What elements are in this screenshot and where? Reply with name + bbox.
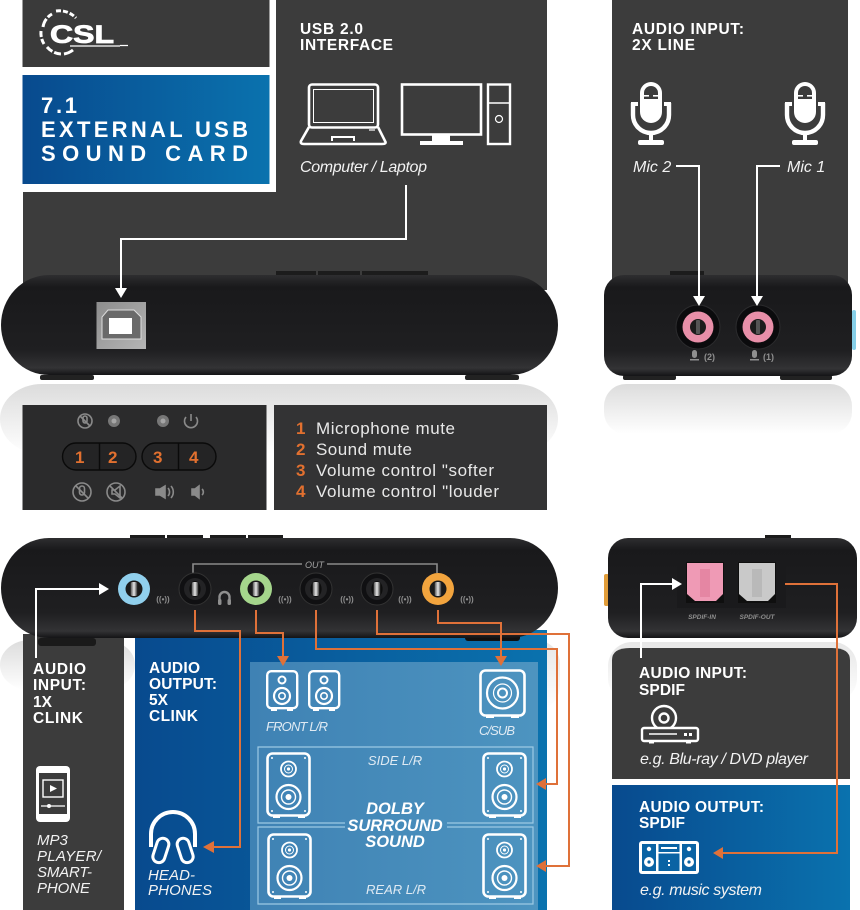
icon: small headphones: [218, 592, 231, 605]
leds: [108, 415, 169, 427]
icon: blu-ray player: [642, 706, 698, 744]
label: mp3 player smartphone: PHONE: [37, 880, 91, 897]
buttons 1 and 2: [62, 443, 216, 470]
label: side l/r: SIDE L/R: [368, 753, 422, 768]
heading: audio input 2x line: 2X LINE: [632, 37, 695, 54]
panel: clink output: [135, 630, 547, 910]
icons: stereo wave marks: ((•)): [460, 595, 474, 604]
device: usb rear view: [1, 271, 558, 380]
label: c/sub: C/SUB: [479, 723, 515, 738]
arrow: spdif out to music system: [713, 584, 837, 859]
icon: desktop computer: [402, 84, 510, 145]
device: clink front view: [1, 535, 558, 641]
heading: audio output 5x clink: CLINK: [149, 708, 199, 725]
label: headphones: PHONES: [148, 882, 212, 899]
heading: audio input 1x clink: INPUT:: [33, 677, 86, 694]
speaker: side right: [484, 754, 526, 818]
speaker: front right: [309, 671, 339, 711]
icons: stereo wave marks: [156, 595, 474, 604]
icon: small microphones: [690, 350, 759, 360]
heading: audio output spdif: SPDIF: [639, 815, 685, 832]
label: computer / laptop: Computer / Laptop: [300, 159, 427, 176]
title: 7.1: 7.1: [41, 93, 77, 118]
icon: music system: [639, 841, 699, 874]
icons: stereo wave marks: ((•)): [340, 595, 354, 604]
icons: stereo wave marks: ((•)): [278, 595, 292, 604]
device: spdif side view: [604, 535, 857, 638]
icon: laptop: [301, 84, 386, 144]
legend: 3 volume softer: 3: [296, 461, 305, 480]
out bracket: [193, 560, 437, 573]
button numbers: [75, 448, 199, 467]
legend: 1 microphone mute: 1: [296, 419, 305, 438]
label: headphones: HEAD-: [148, 867, 195, 884]
label: mic 2: Mic 2: [633, 159, 671, 176]
button numbers: 3: [153, 448, 162, 467]
jack: side: [300, 573, 332, 605]
panel: audio input line background: [612, 0, 848, 290]
device: microphone side view: [604, 271, 856, 380]
arrow: laptop to usb port: [115, 185, 406, 298]
heading: audio output 5x clink: OUTPUT:: [149, 676, 217, 693]
heading: usb 2.0 interface: INTERFACE: [300, 37, 393, 54]
jack: green: [240, 573, 272, 605]
arrow: headphone jack to headphones: [195, 610, 240, 853]
panel: clink input: [23, 634, 124, 910]
heading: audio input spdif: SPDIF: [639, 682, 685, 699]
panel: button legend: [274, 405, 547, 510]
button numbers: 1: [75, 448, 84, 467]
label: mp3 player smartphone: PLAYER/: [37, 848, 103, 865]
port: spdif out: [738, 562, 776, 603]
button numbers: 2: [108, 448, 117, 467]
panel: product title: [22, 75, 270, 184]
logo: CSL wordmark: CSL: [50, 21, 114, 49]
icon: headphones: [151, 812, 195, 864]
jack: blue input: [118, 573, 150, 605]
label: dolby surround sound: DOLBY: [366, 800, 426, 818]
jack label: mic 2: (2): [704, 352, 715, 362]
arrow: green jack to front speakers: [256, 610, 289, 666]
heading: audio input 1x clink: CLINK: [33, 710, 84, 727]
label: dolby surround sound: SURROUND: [347, 817, 443, 835]
arrow: player to spdif in: [641, 578, 682, 658]
heading: usb 2.0 interface: USB 2.0: [300, 21, 363, 38]
jack: mic 1: [736, 305, 780, 349]
legend: 4 volume louder: Volume control "louder: [316, 482, 499, 501]
icon: microphone 2: [631, 82, 671, 145]
legend: 1 microphone mute: Microphone mute: [316, 419, 455, 438]
label: rear l/r: REAR L/R: [366, 882, 426, 897]
arrow: orange jack to subwoofer: [438, 610, 507, 666]
heading: audio input 1x clink: 1X: [33, 694, 53, 711]
icon: microphone 1: [785, 82, 825, 145]
panel: spdif input: [612, 648, 850, 779]
jack: headphones: [179, 573, 211, 605]
jack: mic 2: [676, 305, 720, 349]
panel: surround frames: [258, 747, 533, 904]
title: external usb: EXTERNAL USB: [41, 117, 248, 142]
jack label: spdif in: SPDIF-IN: [688, 614, 716, 621]
heading: audio input 2x line: AUDIO INPUT:: [632, 21, 744, 38]
logo: underline: [70, 44, 128, 47]
panel: device reflections: [0, 384, 857, 710]
heading: audio input 1x clink: AUDIO: [33, 661, 86, 678]
panel: speaker area: [250, 662, 538, 910]
label: mp3 player smartphone: MP3: [37, 832, 68, 849]
logo: CSL ring mark: [41, 11, 76, 54]
heading: audio output 5x clink: AUDIO: [149, 660, 200, 677]
speaker: center subwoofer: [480, 670, 524, 718]
panel: spdif output: [612, 785, 850, 910]
icon: smartphone: [36, 766, 70, 822]
panel: usb interface background: [23, 0, 547, 290]
title: sound card: SOUND CARD: [41, 141, 248, 166]
heading: audio input spdif: AUDIO INPUT:: [639, 665, 747, 682]
arrow: side jack to side speakers: [316, 610, 557, 790]
icons: button function row: [73, 483, 203, 501]
icons: stereo wave marks: ((•)): [398, 595, 412, 604]
jack label: mic 1: (1): [763, 352, 774, 362]
speaker: rear left: [268, 834, 310, 899]
speaker: rear right: [484, 834, 526, 899]
legend: 2 sound mute: Sound mute: [316, 440, 412, 459]
icons: stereo wave marks: ((•)): [156, 595, 170, 604]
label: mp3 player smartphone: SMART-: [37, 864, 92, 881]
label: blu-ray dvd player: e.g. Blu-ray / DVD player: [640, 751, 809, 768]
panel: top button diagram: [22, 405, 266, 510]
speaker: front left: [267, 671, 297, 711]
jack label: spdif out: SPDIF-OUT: [739, 614, 776, 621]
legend: 3 volume softer: Volume control "softer: [316, 461, 494, 480]
label: dolby surround sound: SOUND: [365, 833, 425, 851]
icons: top status row: [78, 414, 198, 428]
arrow: smartphone to blue jack: [36, 583, 109, 658]
label: music system: e.g. music system: [640, 882, 762, 899]
jack: orange: [422, 573, 454, 605]
legend: 4 volume louder: 4: [296, 482, 306, 501]
legend: 2 sound mute: 2: [296, 440, 305, 459]
label: mic 1: Mic 1: [787, 159, 825, 176]
port: spdif in: [686, 562, 724, 603]
arrow: mic 1 to jack: [751, 166, 780, 306]
button numbers: 4: [189, 448, 199, 467]
heading: audio output 5x clink: 5X: [149, 692, 169, 709]
panel: logo: [22, 0, 270, 67]
out bracket: OUT: [305, 560, 326, 570]
arrow: mic 2 to jack: [676, 166, 705, 306]
label: front l/r: FRONT L/R: [266, 719, 328, 734]
jack: rear: [361, 573, 393, 605]
speaker: side left: [268, 754, 310, 818]
usb-b port: [96, 302, 146, 349]
heading: audio output spdif: AUDIO OUTPUT:: [639, 799, 764, 816]
arrow: rear jack to rear speakers: [377, 610, 569, 872]
